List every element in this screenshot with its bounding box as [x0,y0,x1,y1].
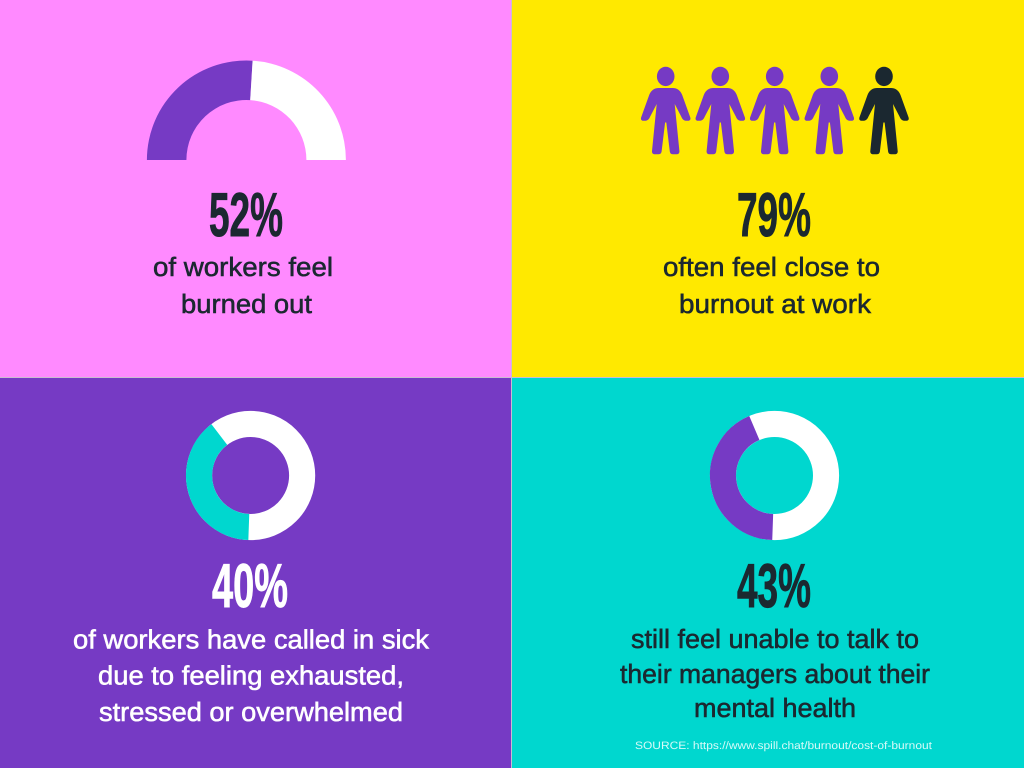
text: of workers feel burned out: of workers feel [153,252,333,282]
text: still feel unable to talk to their managers: their managers about their [620,659,930,689]
text: still feel unable to talk to their managers: mental health [694,693,856,723]
chart: donut 40% [199,424,302,527]
panel: 52% burned out [0,0,511,377]
text: of workers feel burned out: burned out [181,289,313,319]
text: still feel unable to talk to their managers: still feel unable to talk to [631,624,919,654]
text: of workers have called in sick [73,624,430,727]
text: of workers have called in sick: due to feeling exhausted, [98,660,404,690]
statistic: 40%: 40% [212,552,288,621]
text: often feel close to burnout at work: burnout at work [679,289,872,319]
statistic: 52%: 52% [209,181,283,250]
text: of workers have called in sick: of workers have called in sick [73,624,430,654]
statistic: 43%: 43% [737,552,811,621]
text: often feel close to burnout at work: often feel close to [663,252,880,282]
panel: 43% unable to talk to managers [512,378,1024,768]
text: often feel close to burnout at work [663,252,880,319]
text: of workers have called in sick: stressed or overwhelmed [99,697,403,727]
chart: half donut 52% [147,61,346,160]
source citation: SOURCE: https://www.spill.chat/burnout/cost-of-burnout [635,740,932,752]
statistic: 79%: 79% [737,181,811,250]
chart: donut 43% [723,424,826,527]
icon: five people, four highlighted [641,67,909,154]
panel: 79% close to burnout [512,0,1024,377]
panel: 40% called in sick [0,378,511,768]
text: still feel unable to talk to their managers [620,624,930,723]
text: of workers feel burned out [153,252,333,319]
